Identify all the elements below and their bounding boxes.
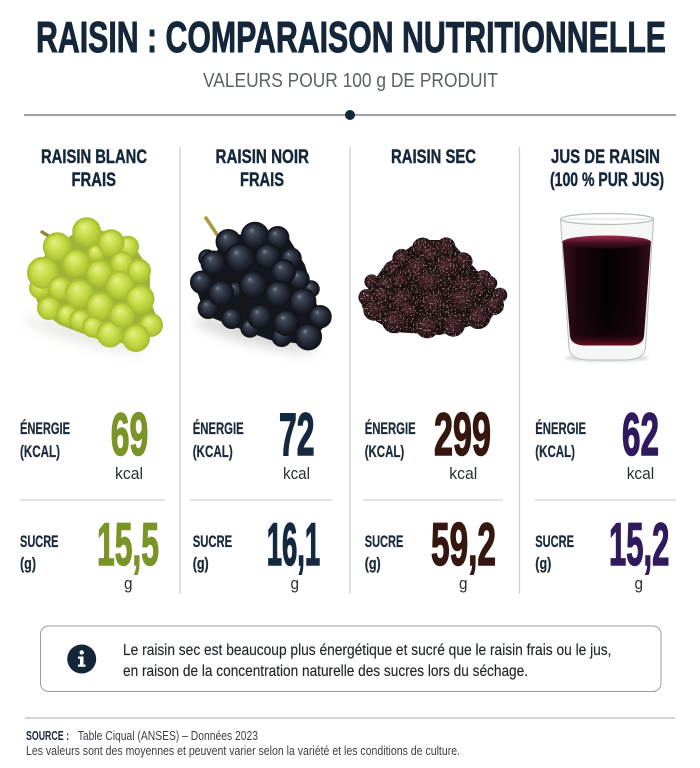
energy row: 72 kcal — [193, 401, 314, 483]
energy row: 62 kcal: 62 — [622, 401, 659, 468]
sugar row: 15,5 g: SUCRE — [20, 533, 58, 551]
column heading: jus de raisin: (100 % PUR JUS) — [550, 170, 664, 191]
energy row: 72 kcal: (KCAL) — [193, 443, 233, 461]
sugar row: 15,5 g — [20, 511, 159, 593]
column heading: raisin sec: RAISIN SEC — [391, 147, 476, 168]
subtitle: VALEURS POUR 100 g DE PRODUIT — [203, 70, 498, 92]
icon: green grapes — [23, 218, 162, 359]
icon: raisin pile — [358, 237, 507, 338]
sugar row: 15,5 g: (g) — [20, 555, 36, 573]
column heading: raisin blanc: FRAIS — [72, 170, 116, 191]
sugar row: 16,1 g: (g) — [193, 555, 209, 573]
energy row: 299 kcal: 299 — [434, 401, 491, 468]
sugar row: 59,2 g: 59,2 — [431, 511, 496, 578]
sugar row: 15,5 g: 15,5 — [97, 511, 159, 578]
column heading: raisin noir: RAISIN NOIR — [216, 147, 309, 168]
energy row: 299 kcal: ÉNERGIE — [365, 419, 416, 438]
icon: glass of juice — [560, 214, 654, 362]
panel: raisin noir frais — [190, 147, 333, 593]
callout text — [123, 642, 612, 680]
sugar row: 59,2 g: (g) — [365, 555, 381, 573]
callout text: Le raisin sec est beaucoup plus énergétique et sucré que le raisin frais ou le jus, — [123, 642, 612, 659]
sugar row: 59,2 g: g — [459, 574, 468, 593]
column heading: jus de raisin — [550, 147, 664, 191]
column heading: raisin blanc: RAISIN BLANC — [41, 147, 147, 168]
sugar row: 15,2 g: (g) — [535, 555, 551, 573]
sugar row: 16,1 g — [193, 511, 320, 593]
panel: raisin noir frais: 16,1 — [267, 511, 320, 578]
panel: raisin blanc frais — [20, 147, 165, 593]
sugar row: 16,1 g: SUCRE — [193, 533, 232, 551]
energy row: 299 kcal — [365, 401, 491, 483]
panel: jus de raisin — [535, 147, 676, 593]
energy row: 72 kcal: 72 — [279, 401, 314, 468]
footer source: SOURCE : — [26, 729, 69, 743]
footer source — [26, 729, 460, 758]
sugar row: 15,2 g: SUCRE — [535, 533, 574, 551]
energy row: 69 kcal: 69 — [111, 401, 148, 468]
energy row: 72 kcal: ÉNERGIE — [193, 419, 244, 438]
energy row: 62 kcal: ÉNERGIE — [535, 419, 586, 438]
energy row: 299 kcal: kcal — [449, 464, 477, 483]
sugar row: 59,2 g: SUCRE — [365, 533, 403, 551]
sugar row: 59,2 g — [365, 511, 496, 593]
sugar row: 16,1 g: g — [290, 574, 299, 593]
energy row: 62 kcal: (KCAL) — [535, 443, 575, 461]
energy row: 69 kcal: kcal — [115, 464, 143, 483]
sugar row: 15,2 g: g — [634, 574, 643, 593]
energy row: 62 kcal — [535, 401, 659, 483]
energy row: 62 kcal: kcal — [627, 464, 654, 483]
column heading: jus de raisin: JUS DE RAISIN — [551, 147, 660, 168]
column heading: raisin noir — [216, 147, 309, 191]
sugar row: 15,2 g — [535, 511, 669, 593]
header divider with dot — [24, 110, 676, 120]
energy row: 299 kcal: (KCAL) — [365, 443, 404, 461]
footer source: Table Ciqual (ANSES) – Données 2023 — [78, 729, 258, 743]
column heading: raisin noir: FRAIS — [240, 170, 284, 191]
footer source: Les valeurs sont des moyennes et peuvent varier selon la variété et les conditions de culture. — [26, 744, 460, 758]
icon: info — [67, 644, 96, 674]
energy row: 72 kcal: kcal — [283, 464, 310, 483]
icon: black grapes — [191, 218, 331, 359]
column heading: raisin blanc — [41, 147, 147, 191]
callout text: en raison de la concentration naturelle des sucres lors du séchage. — [123, 663, 528, 680]
sugar row: 15,5 g: g — [124, 574, 132, 593]
energy row: 69 kcal: ÉNERGIE — [20, 419, 70, 438]
energy row: 69 kcal — [20, 401, 148, 483]
energy row: 69 kcal: (KCAL) — [20, 443, 60, 461]
panel: raisin sec — [358, 147, 507, 593]
callout — [40, 626, 661, 692]
